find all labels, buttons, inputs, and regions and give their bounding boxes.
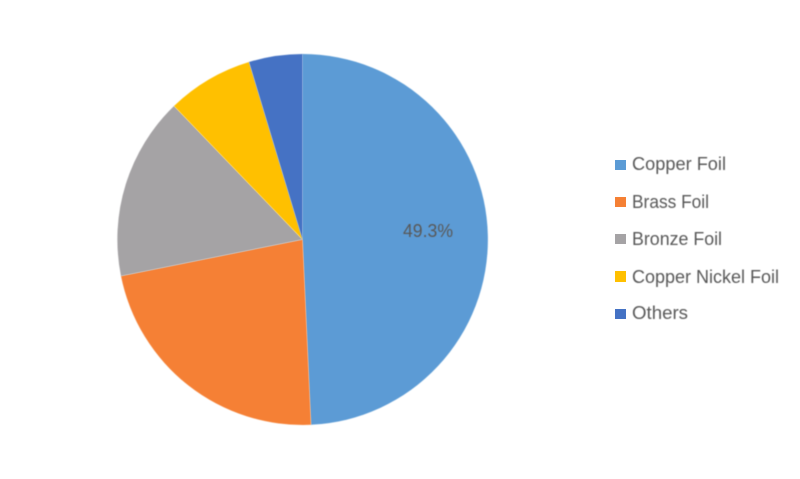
legend — [615, 154, 779, 323]
slice: Copper Nickel Foil — [174, 62, 302, 240]
legend item: Others: Others — [632, 303, 688, 323]
slice: Others — [249, 54, 302, 240]
slice: Copper Foil — [302, 54, 488, 425]
legend item: Copper Nickel Foil: Copper Nickel Foil — [632, 267, 779, 287]
legend item: Copper Foil: Copper Foil — [632, 154, 726, 174]
slice: Brass Foil — [121, 240, 311, 425]
data label: 49.3%: 49.3% — [403, 221, 453, 241]
legend item: Bronze Foil: Bronze Foil — [632, 229, 722, 249]
pie chart — [117, 54, 488, 425]
slice: Bronze Foil — [117, 106, 302, 276]
legend item: Brass Foil: Brass Foil — [632, 192, 709, 212]
